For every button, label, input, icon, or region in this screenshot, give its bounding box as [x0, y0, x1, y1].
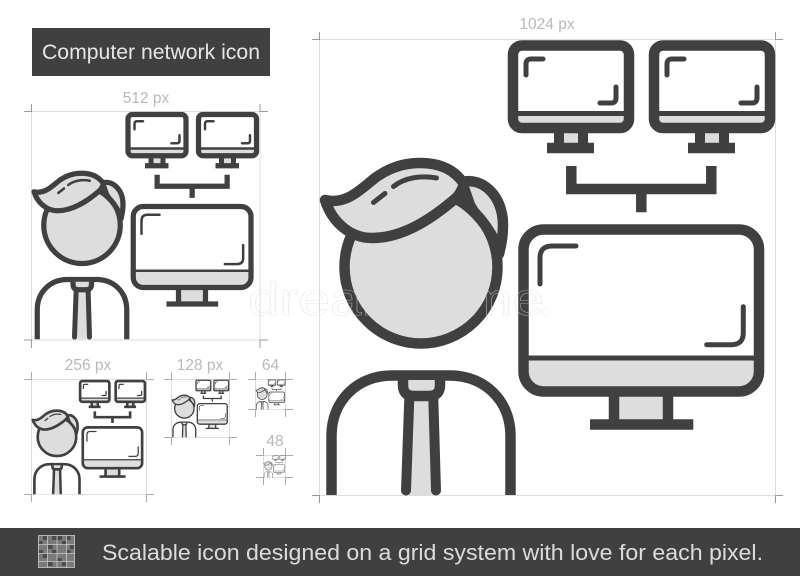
- icon frame: 48: [256, 448, 293, 485]
- footer bar: [0, 528, 800, 576]
- icon: pixel grid: [38, 535, 75, 568]
- watermark: dreamstime: [248, 273, 544, 325]
- icon frame: 128 px: [164, 372, 237, 445]
- size label: 128 px: 128 px: [177, 357, 224, 374]
- icon frame: 64: [248, 372, 293, 417]
- title: [32, 28, 270, 76]
- title: Computer network icon: [42, 41, 260, 64]
- size label: 48: 48: [266, 433, 284, 450]
- footer text: Scalable icon designed on a grid system with love for each pixel.: [102, 540, 763, 565]
- size label: 512 px: 512 px: [123, 90, 170, 107]
- watermark: [248, 262, 550, 325]
- icon frame: 1024 px: [312, 32, 783, 503]
- size label: 256 px: 256 px: [65, 357, 112, 374]
- size label: 1024 px: 1024 px: [519, 16, 575, 33]
- icon frame: 256 px: [24, 372, 154, 502]
- icon frame: 512 px: [24, 104, 268, 348]
- size label: 64: 64: [262, 357, 279, 374]
